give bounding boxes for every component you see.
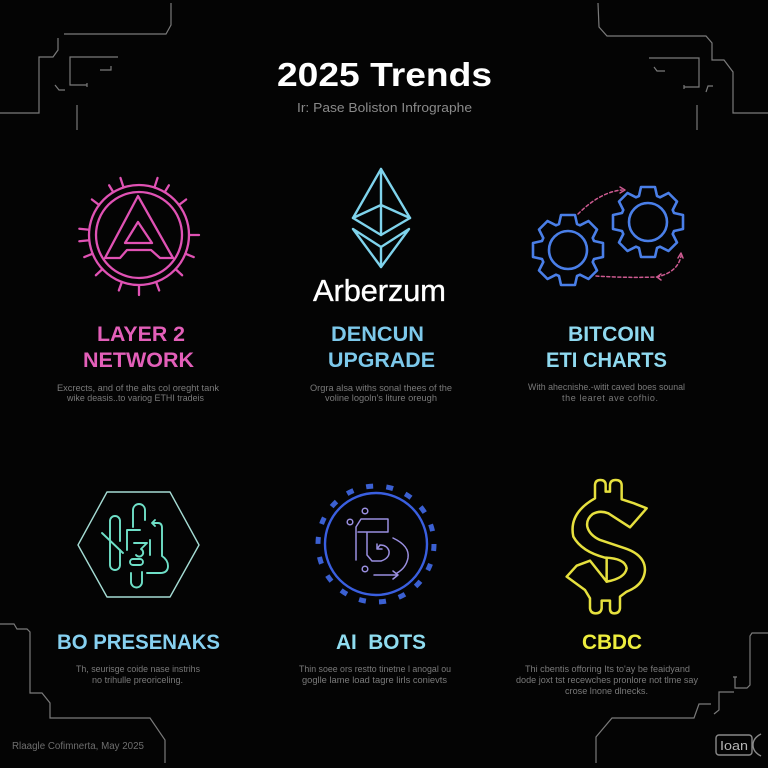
icon: gear left (533, 215, 603, 285)
circuit traces: top left corner (0, 3, 171, 130)
circuit traces: top right corner (598, 3, 768, 130)
description: cbdc: dode joxt tst recewches pronlore not tlme say (516, 675, 698, 685)
circuit traces: bottom right corner (596, 633, 768, 763)
heading: layer 2 network (83, 323, 194, 372)
footer note: Rlaagle Cofimnerta, May 2025 (12, 741, 144, 752)
description: bo presenaks: Th, seurisge coide nase instrihs (76, 664, 200, 674)
heading: ai bots: AI BOTS (336, 631, 426, 654)
icon: robot circle with flow symbol (318, 486, 434, 602)
panel: layer 2 network (57, 178, 220, 403)
description: dencun upgrade (310, 383, 452, 403)
heading: dencun upgrade: UPGRADE (328, 349, 435, 372)
description: layer 2 network: Excrects, and of the alts col oreght tank (57, 383, 220, 393)
description: dencun upgrade: Orgra alsa withs sonal thees of the (310, 383, 452, 393)
icon: hexagon with circuit glyph (78, 492, 199, 597)
description: cbdc: crose lnone dlnecks. (565, 686, 648, 696)
logo badge (716, 734, 761, 756)
heading: bitcoin etf charts (546, 323, 667, 372)
icon: gear ring with letter A (79, 178, 199, 295)
title: 2025 Trends (277, 56, 492, 93)
panel: bo presenaks (57, 492, 220, 685)
description: layer 2 network (57, 383, 220, 403)
description: bitcoin etf charts (528, 382, 685, 403)
panel: bitcoin etf charts (528, 187, 685, 403)
description: dencun upgrade: voline logoln's liture oreugh (325, 393, 437, 403)
heading: cbdc: CBDC (582, 631, 642, 654)
circuit traces: bottom left corner (0, 624, 165, 763)
description: cbdc (516, 664, 698, 696)
panel: dencun upgrade (310, 169, 452, 403)
arrow: top dashed (578, 187, 625, 214)
heading: dencun upgrade: DENCUN (331, 323, 424, 346)
brand wordmark: Arberzum (313, 273, 446, 308)
heading: dencun upgrade (328, 323, 435, 372)
icon: ethereum diamond (353, 169, 410, 267)
heading: layer 2 network: NETWORK (83, 349, 194, 372)
description: ai bots: goglle lame load tagre lirls conievts (302, 675, 448, 685)
description: ai bots (299, 664, 451, 685)
logo badge: Ioan (720, 738, 748, 753)
heading: bitcoin etf charts: BITCOIN (568, 323, 655, 346)
description: ai bots: Thin soee ors restto tinetne l anogal ou (299, 664, 451, 674)
icon: gear right (613, 187, 683, 257)
heading: bitcoin etf charts: ETI CHARTS (546, 349, 667, 372)
description: bitcoin etf charts: With ahecnishe.-witit caved boes sounal (528, 382, 685, 392)
subtitle: Ir: Pase Boliston Infrographe (297, 100, 472, 115)
description: cbdc: Thi cbentis offoring Its to'ay be feaidyand (525, 664, 690, 674)
description: bo presenaks: no trihulle preoriceling. (92, 675, 183, 685)
description: bo presenaks (76, 664, 200, 685)
arrow: bottom dashed (596, 253, 683, 280)
description: layer 2 network: wike deasis..to variog ETHI tradeis (66, 393, 204, 403)
panel: ai bots (299, 486, 451, 685)
heading: layer 2 network: LAYER 2 (97, 323, 185, 346)
description: bitcoin etf charts: the learet ave cofhio. (562, 393, 658, 403)
heading: bo presenaks: BO PRESENAKS (57, 631, 220, 654)
icon: neon dollar sign (567, 480, 647, 613)
panel: cbdc (516, 480, 698, 696)
